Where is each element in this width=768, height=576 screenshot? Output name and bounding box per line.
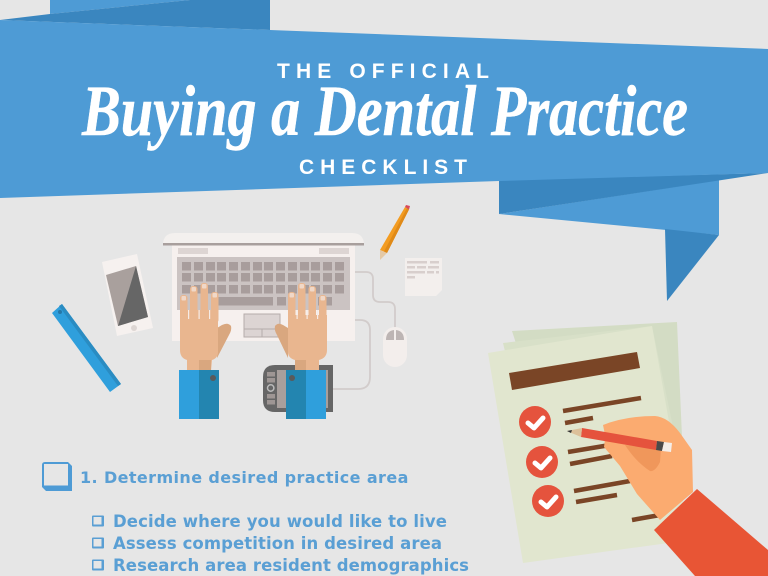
sleeve xyxy=(179,370,199,419)
title: the official: THE OFFICIAL xyxy=(277,60,489,83)
ribbon banner xyxy=(0,0,768,301)
item: assess competition: Assess competition in desired area xyxy=(113,534,442,553)
check circles xyxy=(519,406,564,517)
sleeve xyxy=(306,370,326,419)
palm xyxy=(288,315,327,371)
icon: mouse xyxy=(383,327,407,367)
red sleeve xyxy=(654,489,768,576)
section heading: 1. Determine desired practice area xyxy=(80,468,409,487)
icon: checklist papers xyxy=(488,322,690,563)
icon: right hand and sleeve xyxy=(275,283,327,419)
sub-checklist xyxy=(92,512,469,575)
icon: drawing tablet xyxy=(263,365,333,412)
cables xyxy=(333,272,395,389)
item: research demographics: Research area resident demographics xyxy=(113,556,469,575)
icon: sticky note xyxy=(405,258,442,296)
paper text lines xyxy=(563,398,660,520)
icon: writing hand with red pencil xyxy=(567,416,768,576)
fingers xyxy=(288,292,296,323)
finger gaps and nails xyxy=(182,284,217,319)
item: decide where to live: Decide where you would like to live xyxy=(113,512,447,531)
icon: left hand and sleeve xyxy=(179,283,231,419)
thumb xyxy=(217,324,231,358)
icon: pencil xyxy=(380,205,410,260)
icon: smartphone xyxy=(102,254,153,336)
palm xyxy=(180,315,218,371)
trackpad xyxy=(244,314,280,337)
section checkbox icon xyxy=(42,462,72,491)
title: checklist: CHECKLIST xyxy=(299,156,467,179)
paper heading bar xyxy=(509,352,640,390)
icon: ruler xyxy=(52,304,121,392)
fingers xyxy=(180,295,188,323)
finger gaps and nails xyxy=(290,284,325,319)
keyboard keys xyxy=(182,262,344,306)
icon: laptop xyxy=(163,233,364,341)
thumb xyxy=(275,324,288,358)
